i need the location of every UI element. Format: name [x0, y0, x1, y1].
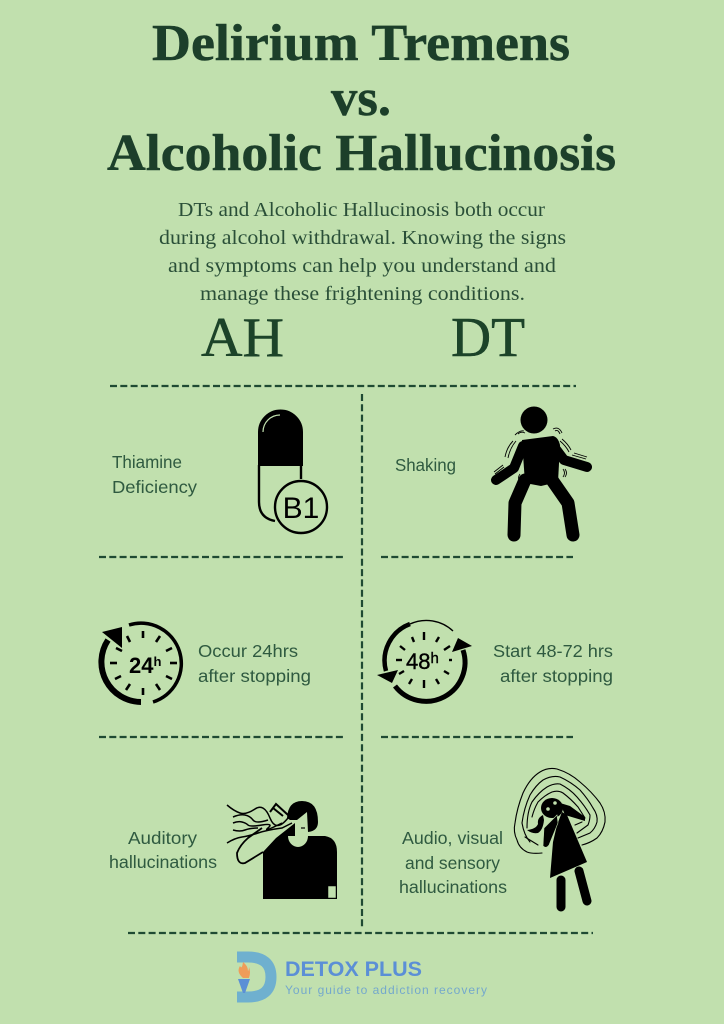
label: auditory hallucinations — [109, 828, 217, 872]
label: occur 24hrs: Occur 24hrs — [198, 641, 298, 661]
label: thiamine deficiency — [112, 452, 197, 497]
label: start 48-72 hrs: Start 48-72 hrs — [493, 641, 613, 661]
title: vs. — [331, 70, 391, 127]
label: shaking: Shaking — [395, 455, 456, 475]
logo mark: D with torch — [237, 957, 271, 997]
label: audio visual sensory hallucinations — [399, 828, 507, 897]
icon: 24h clock: 24 — [129, 653, 153, 678]
label: start 48-72 hrs — [493, 641, 613, 686]
icon: shaking figure — [494, 406, 587, 535]
icon: person hearing voices — [227, 801, 337, 899]
intro text: DTs and Alcoholic Hallucinosis both occur — [178, 199, 545, 221]
icon: 24h clock: h — [153, 654, 161, 669]
intro text: and symptoms can help you understand and — [168, 255, 556, 277]
logo tagline: Your guide to addiction recovery — [285, 983, 487, 997]
label: occur 24hrs: after stopping — [198, 666, 311, 686]
icon: 48h clock — [377, 620, 472, 701]
logo: Detox Plus — [237, 957, 422, 997]
icon: B1 pill: B1 — [283, 492, 319, 525]
label: thiamine deficiency: Deficiency — [112, 477, 197, 497]
label: audio visual sensory hallucinations: and sensory — [405, 853, 500, 873]
label: thiamine deficiency: Thiamine — [112, 452, 182, 472]
column heading: AH: AH — [201, 307, 284, 369]
column heading: DT: DT — [451, 307, 525, 369]
logo wordmark: DETOX PLUS — [285, 957, 422, 981]
label: audio visual sensory hallucinations: hallucinations — [399, 877, 507, 897]
icon: girl surrounded by sensory rings — [514, 768, 605, 907]
icon: 48h clock: h — [430, 650, 439, 667]
icon: 24h clock — [101, 623, 181, 702]
title — [107, 15, 616, 182]
intro text — [159, 199, 566, 305]
icon: B1 pill — [259, 410, 327, 533]
intro text: manage these frightening conditions. — [200, 283, 525, 305]
label: auditory hallucinations: Auditory — [128, 828, 197, 848]
label: auditory hallucinations: hallucinations — [109, 852, 217, 872]
title: Delirium Tremens — [152, 15, 570, 72]
label: audio visual sensory hallucinations: Audio, visual — [402, 828, 503, 848]
title: Alcoholic Hallucinosis — [107, 125, 616, 182]
label: occur 24hrs — [198, 641, 311, 686]
icon: 48h clock: 48 — [406, 649, 430, 674]
label: start 48-72 hrs: after stopping — [500, 666, 613, 686]
intro text: during alcohol withdrawal. Knowing the signs — [159, 227, 566, 249]
